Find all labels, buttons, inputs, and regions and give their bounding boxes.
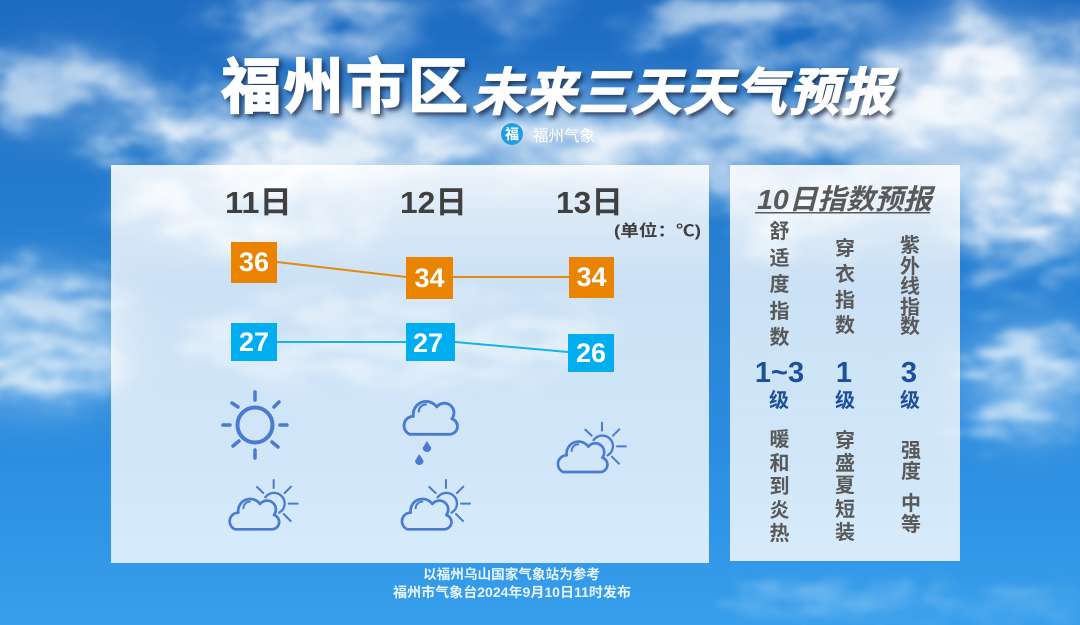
UV index column: 强 [901,440,921,462]
UV index column: 紫 [900,234,920,257]
low temperature line chart: 27 [239,327,269,357]
date headers: 13日 [556,185,623,220]
clothing index column: 短 [835,498,855,521]
panel: three-day forecast [111,165,709,563]
comfort index column: 和 [770,452,790,475]
clothing index column: 数 [835,314,855,337]
clothing index column: 盛 [835,451,855,475]
footer note [393,566,631,600]
icon: partly cloudy 12th night [402,480,470,529]
comfort index column [755,219,804,545]
UV index column: 外 [900,255,920,278]
clothing index column: 穿 [835,428,855,452]
comfort index column: 数 [770,326,790,349]
high temperature line chart: 36 [239,247,269,277]
clothing index column: 衣 [835,262,855,286]
date headers: 11日 [225,185,292,220]
UV index column: 级 [900,389,920,412]
icon: partly cloudy 13th [558,423,626,472]
panel heading: 10日指数预报 [757,184,936,215]
comfort index column: 舒 [770,219,790,243]
comfort index column: 度 [770,273,790,296]
clothing index column [835,236,855,544]
clothing index column: 穿 [835,236,855,260]
comfort index column: 暖 [770,428,790,451]
low temperature line chart: 26 [576,338,606,368]
icon: partly cloudy 11th night [230,480,298,529]
comfort index column: 热 [770,522,790,545]
UV index column: 中 [901,492,921,515]
title: 未来三天天气预报 [472,64,899,121]
comfort index column: 炎 [770,499,790,522]
comfort index column: 到 [770,475,790,498]
title [221,54,899,121]
UV index column: 度 [901,460,921,483]
UV index column: 指 [900,296,920,319]
low temperature line chart [231,323,614,372]
UV index column: 线 [900,275,920,298]
UV index column [900,234,921,536]
low temperature line chart: 27 [413,328,443,358]
unit label: (单位：℃) [614,221,701,240]
date headers: 12日 [400,185,467,220]
UV index column: 3 [901,357,917,389]
footer note: 以福州乌山国家气象站为参考 [423,566,600,582]
panel: index forecast [730,165,960,561]
logo: Fuzhou Meteorology: 福 [505,126,519,142]
footer note: 福州市气象台2024年9月10日11时发布 [393,584,631,600]
clothing index column: 夏 [835,475,855,497]
comfort index column: 适 [770,247,790,270]
clothing index column: 指 [835,289,855,312]
logo: Fuzhou Meteorology [501,123,595,145]
high temperature line chart [231,242,614,299]
UV index column: 等 [901,513,921,536]
high temperature line chart: 34 [414,263,445,293]
comfort index column: 1~3 [755,357,804,389]
icon: sunny 11th [223,392,287,458]
logo: Fuzhou Meteorology: 福州气象 [533,127,595,145]
high temperature line chart: 34 [576,262,607,292]
clothing index column: 装 [835,521,855,544]
UV index column: 数 [900,315,920,338]
comfort index column: 指 [770,300,790,323]
clothing index column: 1 [836,357,852,389]
clothing index column: 级 [835,389,855,412]
icon: light rain 12th [404,401,457,465]
title: 福州市区 [221,54,468,121]
comfort index column: 级 [769,389,789,412]
date headers [225,185,623,220]
